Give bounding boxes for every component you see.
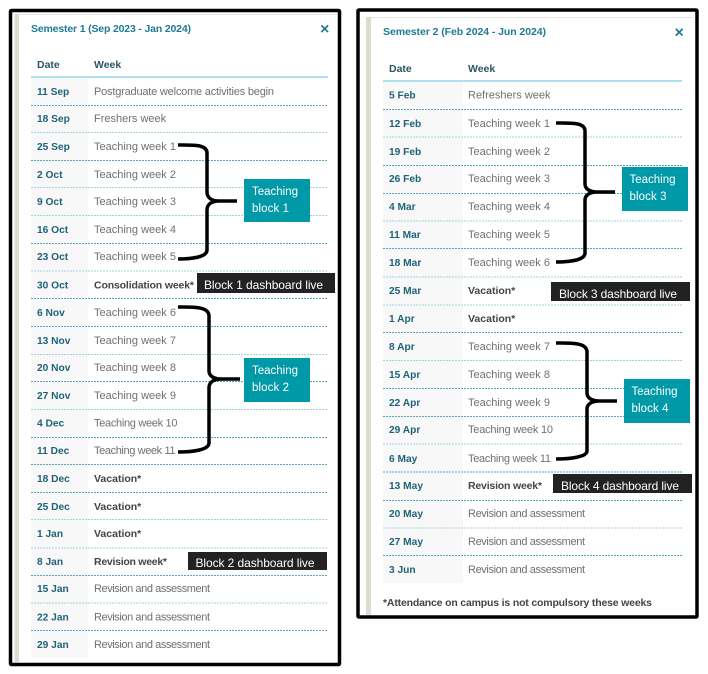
- table rows: semester 1: Teaching week 8: [94, 362, 176, 374]
- table rows: semester 2: 3 Jun: [389, 565, 416, 576]
- table rows: semester 1: Vacation*: [94, 528, 142, 540]
- brace: teaching block 1: [178, 145, 237, 259]
- table rows: semester 2: Teaching week 5: [468, 229, 550, 241]
- table rows: semester 1: 18 Sep: [37, 114, 70, 125]
- callout: teaching block 3: Teaching: [630, 174, 676, 186]
- callout: teaching block 1: [244, 179, 310, 222]
- table rows: semester 2: 8 Apr: [389, 342, 415, 353]
- label: block 1 dashboard live: [196, 272, 337, 294]
- table rows: semester 2: Revision and assessment: [468, 536, 585, 548]
- table rows: semester 2: 5 Feb: [389, 90, 416, 102]
- table rows: semester 1: Postgraduate welcome activities begin: [94, 86, 274, 98]
- table rows: semester 2: Revision week*: [468, 480, 543, 492]
- callout: teaching block 2: [244, 358, 310, 402]
- table rows: semester 1: 4 Dec: [37, 418, 65, 430]
- table rows: semester 2: 6 May: [389, 454, 418, 465]
- table rows: semester 1: Teaching week 4: [94, 224, 176, 236]
- panel: semester 2: [358, 10, 697, 617]
- table rows: semester 2: 11 Mar: [389, 230, 421, 241]
- table rows: semester 2: 1 Apr: [389, 314, 415, 325]
- heading: semester 1: Semester 1 (Sep 2023 - Jan 2024): [31, 23, 191, 35]
- panel: semester 1: [10, 10, 340, 664]
- icon: close semester 2: ×: [674, 24, 684, 42]
- callout: teaching block 1: block 1: [252, 203, 289, 215]
- table rows: semester 2: 27 May: [389, 537, 423, 548]
- table rows: semester 1: 16 Oct: [37, 225, 69, 236]
- table rows: semester 1: Teaching week 6: [94, 307, 176, 319]
- brace: teaching block 2: [178, 307, 240, 452]
- callout: teaching block 4: block 4: [632, 403, 669, 415]
- table header: semester 1: Date: [37, 59, 60, 71]
- table rows: semester 2: Teaching week 9: [468, 397, 550, 409]
- table rows: semester 2: [389, 90, 585, 576]
- table rows: semester 1: 11 Sep: [37, 87, 69, 98]
- table rows: semester 1: Freshers week: [94, 113, 167, 125]
- table rows: semester 2: 15 Apr: [389, 370, 420, 381]
- table rows: semester 2: 13 May: [389, 481, 423, 492]
- label: block 1 dashboard live: Block 1 dashboard live: [204, 278, 323, 292]
- callout: teaching block 4: [624, 379, 690, 423]
- table rows: semester 1: 9 Oct: [37, 197, 63, 208]
- table rows: semester 1: Teaching week 9: [94, 390, 176, 402]
- table rows: semester 1: Teaching week 10: [94, 418, 178, 430]
- callout: teaching block 2: block 2: [252, 382, 289, 394]
- brace: teaching block 4: [556, 343, 617, 459]
- label: block 3 dashboard live: [551, 282, 690, 301]
- table rows: semester 2: 26 Feb: [389, 174, 421, 185]
- table rows: semester 1: Teaching week 5: [94, 251, 176, 263]
- table rows: semester 2: 29 Apr: [389, 425, 420, 436]
- callout: teaching block 3: block 3: [630, 191, 666, 203]
- table rows: semester 2: 18 Mar: [389, 258, 421, 269]
- table rows: semester 1: Teaching week 11: [94, 445, 176, 457]
- label: block 3 dashboard live: Block 3 dashboard live: [559, 287, 677, 301]
- callout: teaching block 2: Teaching: [252, 365, 298, 377]
- table header: semester 2: Week: [468, 63, 495, 75]
- table rows: semester 2: Teaching week 8: [468, 369, 550, 381]
- table rows: semester 2: Teaching week 2: [468, 146, 550, 158]
- label: block 4 dashboard live: Block 4 dashboard live: [561, 479, 679, 493]
- table rows: semester 2: Teaching week 10: [468, 424, 553, 436]
- table rows: semester 1: 30 Oct: [37, 280, 69, 292]
- table rows: semester 1: 25 Sep: [37, 142, 70, 153]
- table rows: semester 2: 25 Mar: [389, 286, 421, 297]
- table header: semester 2: [389, 63, 495, 75]
- table rows: semester 1: 6 Nov: [37, 308, 65, 319]
- table rows: semester 2: Refreshers week: [468, 90, 551, 102]
- table rows: semester 2: Teaching week 4: [468, 201, 550, 213]
- callout: teaching block 1: Teaching: [252, 186, 298, 198]
- label: block 4 dashboard live: [553, 474, 692, 493]
- table rows: semester 1: 22 Jan: [37, 612, 69, 624]
- table rows: semester 1: 8 Jan: [37, 557, 63, 568]
- callout: teaching block 3: [622, 167, 688, 211]
- table rows: semester 2: 22 Apr: [389, 398, 420, 409]
- table rows: semester 1: 2 Oct: [37, 170, 63, 181]
- table rows: semester 1: 27 Nov: [37, 391, 71, 402]
- table header: semester 1: Week: [94, 59, 121, 71]
- table rows: semester 2: 4 Mar: [389, 202, 416, 213]
- table rows: semester 2: Teaching week 7: [468, 341, 550, 353]
- table rows: semester 1: 25 Dec: [37, 502, 70, 513]
- table rows: semester 1: Teaching week 2: [94, 169, 176, 181]
- callout: teaching block 4: Teaching: [632, 386, 678, 398]
- table rows: semester 2: Revision and assessment: [468, 508, 585, 520]
- table rows: semester 1: 18 Dec: [37, 474, 70, 485]
- table rows: semester 1: Revision and assessment: [94, 639, 210, 651]
- table header: semester 1: [37, 59, 121, 71]
- table header: semester 2: Date: [389, 63, 412, 75]
- table rows: semester 2: 20 May: [389, 509, 423, 520]
- table rows: semester 1: 13 Nov: [37, 336, 71, 347]
- table rows: semester 1: Consolidation week*: [94, 280, 195, 292]
- table rows: semester 2: Vacation*: [468, 285, 516, 297]
- table rows: semester 1: Teaching week 7: [94, 335, 176, 347]
- heading: semester 2: Semester 2 (Feb 2024 - Jun 2024): [383, 26, 546, 38]
- table rows: semester 1: Revision week*: [94, 556, 168, 568]
- table rows: semester 1: 29 Jan: [37, 640, 69, 651]
- brace: teaching block 3: [556, 123, 615, 262]
- table rows: semester 1: 20 Nov: [37, 363, 71, 374]
- table rows: semester 1: 23 Oct: [37, 252, 69, 263]
- footnote: *Attendance on campus is not compulsory these weeks: [383, 597, 652, 609]
- table rows: semester 1: 1 Jan: [37, 529, 63, 540]
- table rows: semester 2: Vacation*: [468, 313, 516, 325]
- table rows: semester 2: 19 Feb: [389, 147, 421, 158]
- table rows: semester 2: Teaching week 3: [468, 173, 550, 185]
- table rows: semester 1: [37, 86, 274, 651]
- table rows: semester 2: Revision and assessment: [468, 564, 585, 576]
- table rows: semester 1: 15 Jan: [37, 584, 69, 595]
- table rows: semester 2: 12 Feb: [389, 119, 421, 130]
- table rows: semester 1: Vacation*: [94, 501, 142, 513]
- label: block 2 dashboard live: [188, 552, 327, 570]
- table rows: semester 2: Teaching week 6: [468, 257, 550, 269]
- table rows: semester 1: Vacation*: [94, 473, 142, 485]
- label: block 2 dashboard live: Block 2 dashboard live: [196, 556, 315, 570]
- table rows: semester 1: Teaching week 3: [94, 196, 176, 208]
- table rows: semester 2: Teaching week 1: [468, 118, 550, 130]
- table rows: semester 1: Revision and assessment: [94, 583, 210, 595]
- table rows: semester 2: Teaching week 11: [468, 453, 551, 465]
- table rows: semester 1: Teaching week 1: [94, 141, 176, 153]
- icon: close semester 1: ×: [320, 21, 329, 38]
- table rows: semester 1: 11 Dec: [37, 446, 70, 457]
- table rows: semester 1: Revision and assessment: [94, 612, 210, 624]
